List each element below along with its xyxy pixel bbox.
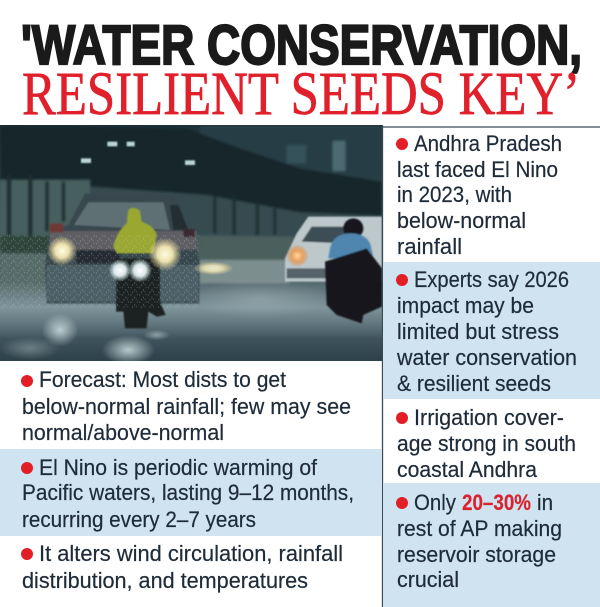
- text block: Andhra Pradesh: [414, 131, 562, 156]
- text block: Only: [414, 490, 457, 515]
- text block: impact may be: [397, 293, 534, 318]
- headlights: [47, 236, 309, 282]
- panel: right first bullet: [396, 131, 562, 259]
- text block: reservoir storage: [397, 542, 556, 567]
- bullet: [396, 274, 408, 286]
- band: [383, 262, 600, 399]
- text block: Irrigation cover-: [414, 405, 564, 430]
- text block: below-normal: [397, 208, 526, 233]
- text block: El Nino is periodic warming of: [39, 455, 318, 480]
- distant buildings: [200, 125, 382, 198]
- text block: normal/above-normal: [22, 420, 224, 445]
- bullet: [21, 375, 33, 387]
- text block: water conservation: [396, 345, 577, 370]
- bullet: [396, 412, 408, 424]
- car: front left: [45, 193, 199, 303]
- text block: It alters wind circulation, rainfall: [39, 541, 343, 566]
- band: [0, 449, 382, 536]
- trees: [0, 125, 382, 217]
- text block: Forecast: Most dists to get: [39, 367, 287, 392]
- text block: & resilient seeds: [397, 371, 551, 396]
- road haze: [199, 237, 293, 260]
- panel: left third bullet: [21, 541, 343, 593]
- hedge: [0, 236, 50, 256]
- text block: 20–30%: [462, 490, 531, 515]
- bullet: [396, 138, 408, 150]
- text block: rainfall: [397, 234, 462, 259]
- text block: last faced El Nino: [397, 157, 558, 182]
- band: [383, 483, 600, 607]
- right motorcycle and riders: [325, 218, 382, 323]
- title: [21, 13, 582, 128]
- text block: Experts say 2026: [414, 267, 569, 292]
- panel: left first bullet: [21, 367, 351, 445]
- wet road reflections: [0, 278, 327, 365]
- text block: in 2023, with: [397, 182, 512, 207]
- panel: right fourth bullet: [383, 483, 600, 607]
- text block: crucial: [397, 567, 459, 592]
- bullet: [21, 548, 33, 560]
- right car: [285, 217, 382, 282]
- panel: left second bullet: [0, 449, 382, 536]
- bullet: [21, 462, 33, 474]
- text block: recurring every 2–7 years: [22, 507, 256, 532]
- rain texture: [0, 235, 200, 308]
- text block: rest of AP making: [397, 516, 562, 541]
- text block: Pacific waters, lasting 9–12 months,: [22, 480, 354, 505]
- text block: below-normal rainfall; few may see: [22, 394, 351, 419]
- front motorcycle and rider: [113, 208, 166, 328]
- text block: limited but stress: [397, 319, 559, 344]
- text block: age strong in south: [397, 431, 576, 456]
- panel: right second bullet: [383, 262, 600, 399]
- road mist: [0, 282, 382, 338]
- text block: coastal Andhra: [397, 457, 537, 482]
- bullet: [396, 497, 408, 509]
- column divider: [382, 125, 600, 607]
- street lights: [81, 142, 195, 165]
- photo: motorists in heavy rain: [0, 125, 382, 361]
- text block: distribution, and temperatures: [22, 568, 308, 593]
- text block: in: [537, 490, 553, 515]
- panel: right third bullet: [396, 405, 576, 482]
